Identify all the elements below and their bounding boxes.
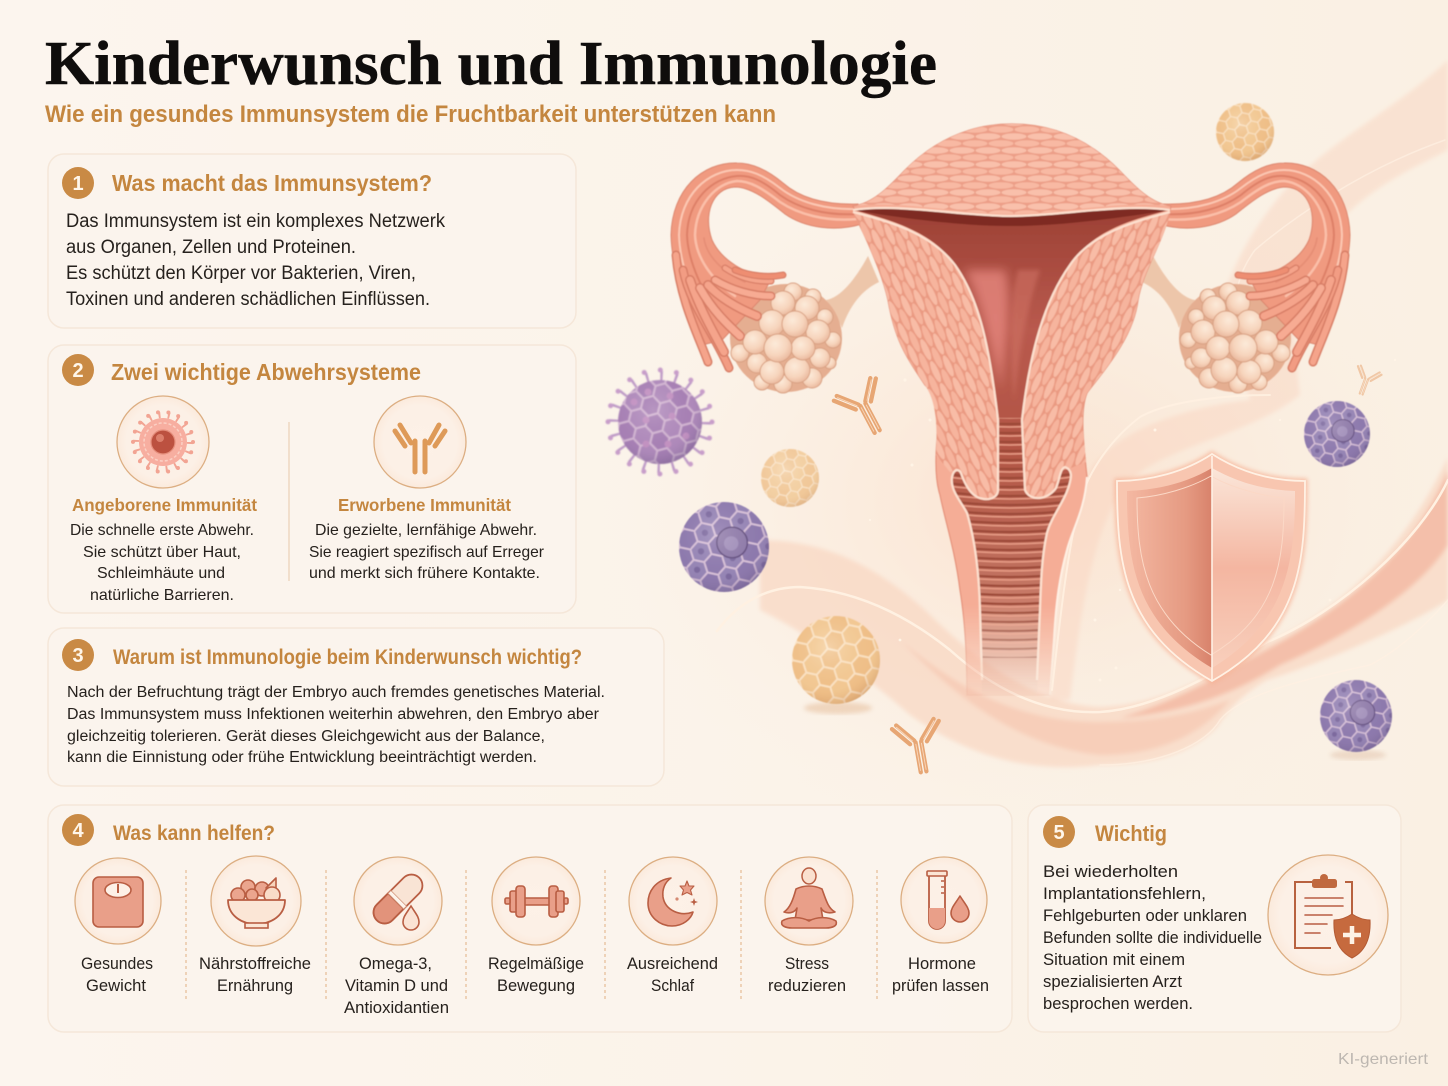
body text 5: Fehlgeburten oder unklaren (1043, 907, 1247, 925)
adaptive text: Die gezielte, lernfähige Abwehr. (315, 522, 537, 539)
label: Gesundes Gewicht: Gewicht (86, 977, 146, 995)
label: Omega-3: Vitamin D und (345, 977, 448, 995)
adaptive text: und merkt sich frühere Kontakte. (309, 565, 540, 582)
label: Ausreichend Schlaf (627, 955, 718, 995)
label: Gesundes Gewicht (81, 955, 153, 995)
label: Gesundes Gewicht: Gesundes (81, 955, 153, 973)
adaptive text (309, 522, 545, 582)
label: Hormone prüfen lassen: Hormone (908, 955, 976, 973)
shadow under tan cell (804, 702, 872, 714)
cell: tan top (1216, 103, 1274, 161)
body text 5: Implantationsfehlern, (1043, 885, 1206, 903)
dashed dividers (186, 870, 877, 1000)
body text 3: gleichzeitig tolerieren. Gerät dieses Gleichgewicht aus der Balance, (67, 728, 545, 745)
innate text: Schleimhäute und (97, 565, 225, 582)
label: Stress reduzieren: Stress (785, 955, 829, 973)
label: Regelmäßige Bewegung (488, 955, 584, 995)
cell: purple bottom right (1320, 680, 1392, 752)
body text 1: Toxinen und anderen schädlichen Einflüssen. (66, 289, 430, 310)
body text 3 (67, 684, 605, 766)
cell: purple large (679, 502, 769, 592)
background glow (600, 160, 1448, 840)
label: Stress reduzieren (768, 955, 846, 995)
body text 1 (66, 211, 445, 310)
icon: clipboard with shield (1268, 855, 1388, 975)
body text 5: Situation mit einem (1043, 951, 1185, 969)
panel 5: Wichtig (1028, 805, 1401, 1032)
shadow under purple cell (1330, 750, 1386, 760)
number badge 2: 2 (72, 360, 84, 382)
antibody bottom (891, 718, 947, 776)
body text 5: besprochen werden. (1043, 995, 1193, 1013)
body text 3: kann die Einnistung oder frühe Entwicklung beeinträchtigt werden. (67, 749, 537, 766)
icon: fruit bowl (211, 856, 301, 946)
icon: dumbbell (492, 857, 580, 945)
heading 5: Wichtig (1095, 821, 1167, 846)
right fallopian tube and ovary (1142, 163, 1350, 393)
body text 3: Das Immunsystem muss Infektionen weiterhin abwehren, den Embryo aber (67, 706, 599, 723)
icon: moon and stars (629, 857, 717, 945)
icon: antibody (374, 396, 466, 488)
cell: purple upper right (1304, 401, 1370, 467)
adaptive heading: Erworbene Immunität (338, 495, 511, 515)
body text 5: spezialisierten Arzt (1043, 973, 1182, 991)
antibody left (833, 376, 898, 443)
label: Ausreichend Schlaf: Schlaf (651, 977, 694, 995)
uterus illustration (671, 124, 1350, 695)
number badge 3: 3 (72, 645, 84, 667)
cell: tan large (792, 616, 880, 704)
number badge 1: 1 (72, 173, 84, 195)
panel 2: Zwei wichtige Abwehrsysteme (48, 345, 576, 613)
heading 4: Was kann helfen? (113, 822, 275, 845)
title: Kinderwunsch und Immunologie (45, 30, 937, 98)
cell: spiked virus (608, 370, 712, 474)
icon: scale (75, 858, 161, 944)
label: Omega-3 (344, 955, 449, 1017)
heading 2: Zwei wichtige Abwehrsysteme (111, 359, 421, 385)
body text 1: Es schützt den Körper vor Bakterien, Viren, (66, 263, 416, 284)
innate text: Die schnelle erste Abwehr. (70, 522, 254, 539)
label: Regelmäßige Bewegung: Bewegung (497, 977, 575, 995)
panel 3: Warum Immunologie (48, 628, 664, 786)
innate text: Sie schützt über Haut, (83, 544, 241, 561)
innate heading: Angeborene Immunität (72, 495, 257, 515)
label: Regelmäßige Bewegung: Regelmäßige (488, 955, 584, 973)
body text 1: aus Organen, Zellen und Proteinen. (66, 237, 356, 258)
innate text: natürliche Barrieren. (90, 587, 234, 604)
label: Ausreichend Schlaf: Ausreichend (627, 955, 718, 973)
left fallopian tube and ovary (671, 163, 879, 393)
number badge 5: 5 (1053, 822, 1065, 844)
label: Stress reduzieren: reduzieren (768, 977, 846, 995)
label: Omega-3: Antioxidantien (344, 999, 449, 1017)
body text 3: Nach der Befruchtung trägt der Embryo auch fremdes genetisches Material. (67, 684, 605, 701)
label: Hormone prüfen lassen: prüfen lassen (892, 977, 989, 995)
panel 1: Was macht das Immunsystem (48, 154, 576, 328)
body text 5 (1043, 863, 1262, 1013)
label: Omega-3: Omega-3, (359, 955, 432, 973)
number badge 2 (62, 354, 94, 386)
icon: test tube and drop (901, 857, 987, 943)
label: Nährstoffreiche Ernährung (199, 955, 311, 995)
heading 1: Was macht das Immunsystem? (112, 170, 432, 196)
label: Nährstoffreiche Ernährung: Nährstoffreiche (199, 955, 311, 973)
innate text (70, 522, 254, 604)
label: Hormone prüfen lassen (892, 955, 989, 995)
adaptive text: Sie reagiert spezifisch auf Erreger (309, 544, 545, 561)
AI-generated note: KI-generiert (1338, 1051, 1429, 1068)
label: Nährstoffreiche Ernährung: Ernährung (217, 977, 293, 995)
panel 4: Was kann helfen (48, 805, 1012, 1032)
icon: capsule and drop (354, 857, 442, 945)
heading 3: Warum ist Immunologie beim Kinderwunsch wichtig? (113, 646, 582, 669)
body text 1: Das Immunsystem ist ein komplexes Netzwerk (66, 211, 445, 232)
icon: meditating person (765, 857, 853, 945)
number badge 1 (62, 167, 94, 199)
antibody faint right (1349, 365, 1382, 398)
body text 5: Bei wiederholten (1043, 863, 1178, 881)
icon: innate immunity cell (117, 396, 209, 488)
number badge 4: 4 (72, 820, 84, 842)
number badge 5 (1043, 816, 1075, 848)
flowing ribbons (717, 60, 1448, 767)
number badge 3 (62, 639, 94, 671)
divider (288, 422, 290, 581)
subtitle: Wie ein gesundes Immunsystem die Fruchtbarkeit unterstützen kann (45, 101, 776, 128)
cell: small tan (761, 449, 819, 507)
uterus body (853, 124, 1171, 695)
number badge 4 (62, 814, 94, 846)
body text 5: Befunden sollte die individuelle (1043, 929, 1262, 947)
shield (1117, 454, 1305, 681)
